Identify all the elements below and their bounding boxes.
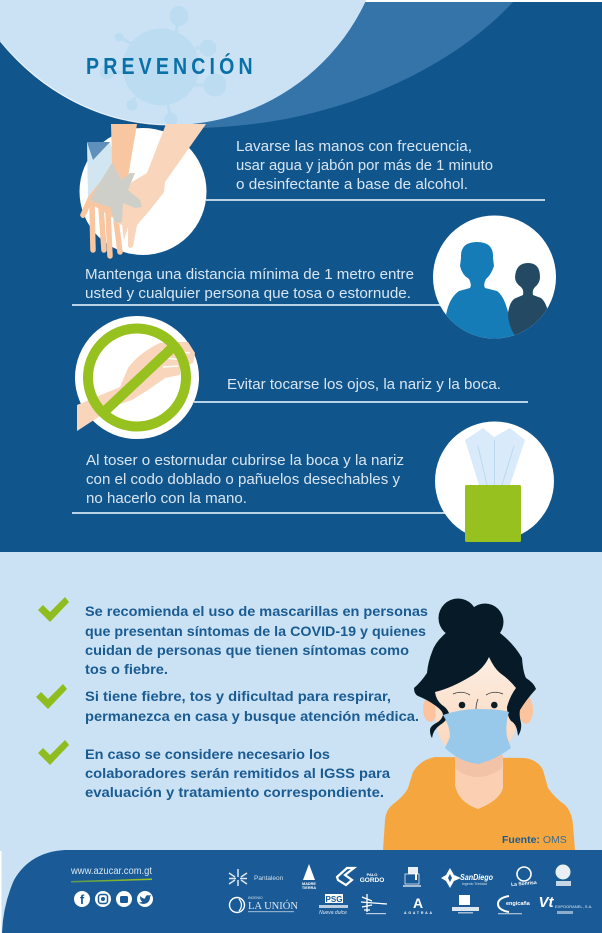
- mask: [443, 709, 511, 764]
- logo: Pantaleon: Pantaleon: [254, 875, 284, 882]
- icon: hand washing: [80, 124, 206, 256]
- logo: Agatraa: A: [413, 895, 423, 911]
- logo: Palo Gordo: [337, 868, 384, 885]
- logo: Agatraa: [404, 895, 432, 915]
- logo: La Unión: INGENIO: [248, 896, 263, 900]
- recommendation 3: evaluación y tratamiento correspondiente.: [85, 784, 384, 800]
- recommendation 2: Si tiene fiebre, tos y dificultad para respirar,: [85, 688, 391, 704]
- panel: footer: [2, 850, 602, 933]
- logo: Cengicaña: [498, 896, 531, 914]
- recommendation 3: colaboradores serán remitidos al IGSS para: [85, 765, 390, 781]
- logo: Madre Tierra: [302, 864, 316, 890]
- left hand fingers: [92, 205, 120, 256]
- step 3 text: Evitar tocarse los ojos, la nariz y la boca.: [227, 377, 501, 393]
- logo: Palo Gordo: GORDO: [360, 877, 384, 884]
- icon: checkmark 2: [36, 684, 67, 709]
- footer url: www.azucar.com.gt: [70, 866, 152, 877]
- title: PREVENCIÓN: [86, 52, 253, 79]
- step 4 text: Al toser o estornudar cubrirse la boca y la nariz: [86, 453, 404, 469]
- logo: San Diego: Ingenio Trinidad: [462, 882, 487, 886]
- source: Fuente: OMS: [502, 834, 567, 846]
- logo: Expogranel: EXPOGRANEL, S.A.: [555, 904, 592, 909]
- logo: Santa Ana: [556, 864, 571, 886]
- footer url: [70, 866, 152, 882]
- logo: Cane plant: [361, 894, 387, 914]
- recommendation 3: [85, 746, 390, 800]
- logo: San Diego: [441, 868, 493, 888]
- icon: two people: [433, 216, 556, 345]
- step 2 text: [85, 267, 414, 302]
- step 4 text: [86, 453, 404, 507]
- step 1 text: o desinfectante a base de alcohol.: [236, 177, 468, 193]
- recommendation 1: Se recomienda el uso de mascarillas en personas: [85, 603, 428, 619]
- step 4 text: con el codo doblado o pañuelos desechables y: [86, 472, 401, 488]
- recommendation 2: [85, 688, 419, 724]
- recommendation 1: [85, 603, 428, 677]
- recommendation 3: En caso se considere necesario los: [85, 746, 330, 762]
- recommendation 2: permanezca en casa y busque atención médica.: [85, 708, 419, 724]
- icon: tissue box: [435, 422, 554, 542]
- right hand: [113, 124, 206, 248]
- step 1 text: usar agua y jabón por más de 1 minuto: [236, 158, 493, 174]
- logo: PSG: [319, 894, 348, 916]
- icon: checkmark 1: [38, 597, 69, 622]
- recommendation 1: que presentan síntomas de la COVID-19 y quienes: [85, 623, 426, 639]
- panel: prevention background: [0, 2, 602, 552]
- recommendation 1: cuidan de personas que tienen síntomas como: [85, 642, 409, 658]
- step 1 text: Lavarse las manos con frecuencia,: [236, 139, 472, 155]
- logos: [229, 864, 592, 916]
- logo: Fundazucar: [452, 895, 479, 914]
- logo: Madre Tierra: MADRE: [302, 882, 316, 886]
- icon: no touching face: [75, 316, 199, 439]
- step 1 text: [236, 139, 493, 193]
- logo: Agro: [403, 867, 421, 887]
- header: layered circles: [0, 0, 513, 128]
- step 4 text: no hacerlo con la mano.: [86, 491, 247, 507]
- icon: virus: [100, 6, 226, 125]
- logo: Cengicaña: engicaña: [506, 901, 531, 907]
- overlap gray: [90, 163, 142, 223]
- logo: San Diego: SanDiego: [460, 873, 493, 882]
- logo: La Sonrisa: La Sonrisa: [511, 880, 537, 888]
- illustration: woman with mask: [383, 598, 575, 850]
- logo: PSG: PSG: [326, 895, 342, 904]
- logo: Palo Gordo: PALO: [367, 872, 377, 877]
- logo: Expogranel: Vt: [538, 894, 555, 911]
- recommendation 1: tos o fiebre.: [85, 661, 168, 677]
- logo: Madre Tierra: TIERRA: [302, 886, 316, 890]
- social icons: f: [80, 892, 85, 907]
- logo: Expogranel: [538, 894, 592, 914]
- logo: La Unión: LA UNIÓN: [248, 900, 298, 912]
- logo: La Sonrisa: [511, 867, 537, 888]
- step 2 text: Mantenga una distancia mínima de 1 metro entre: [85, 267, 414, 283]
- icon: checkmark 3: [38, 740, 69, 765]
- logo: Pantaleon: [229, 869, 284, 886]
- step 2 text: usted y cualquier persona que tosa o estornude.: [85, 286, 411, 302]
- logo: PSG: Nueva dulce: [319, 910, 347, 916]
- logo: La Unión: [230, 896, 298, 912]
- panel: recommendations: [0, 552, 602, 933]
- logo: Agatraa: AGATRAA: [404, 911, 432, 915]
- social icons: [74, 891, 153, 907]
